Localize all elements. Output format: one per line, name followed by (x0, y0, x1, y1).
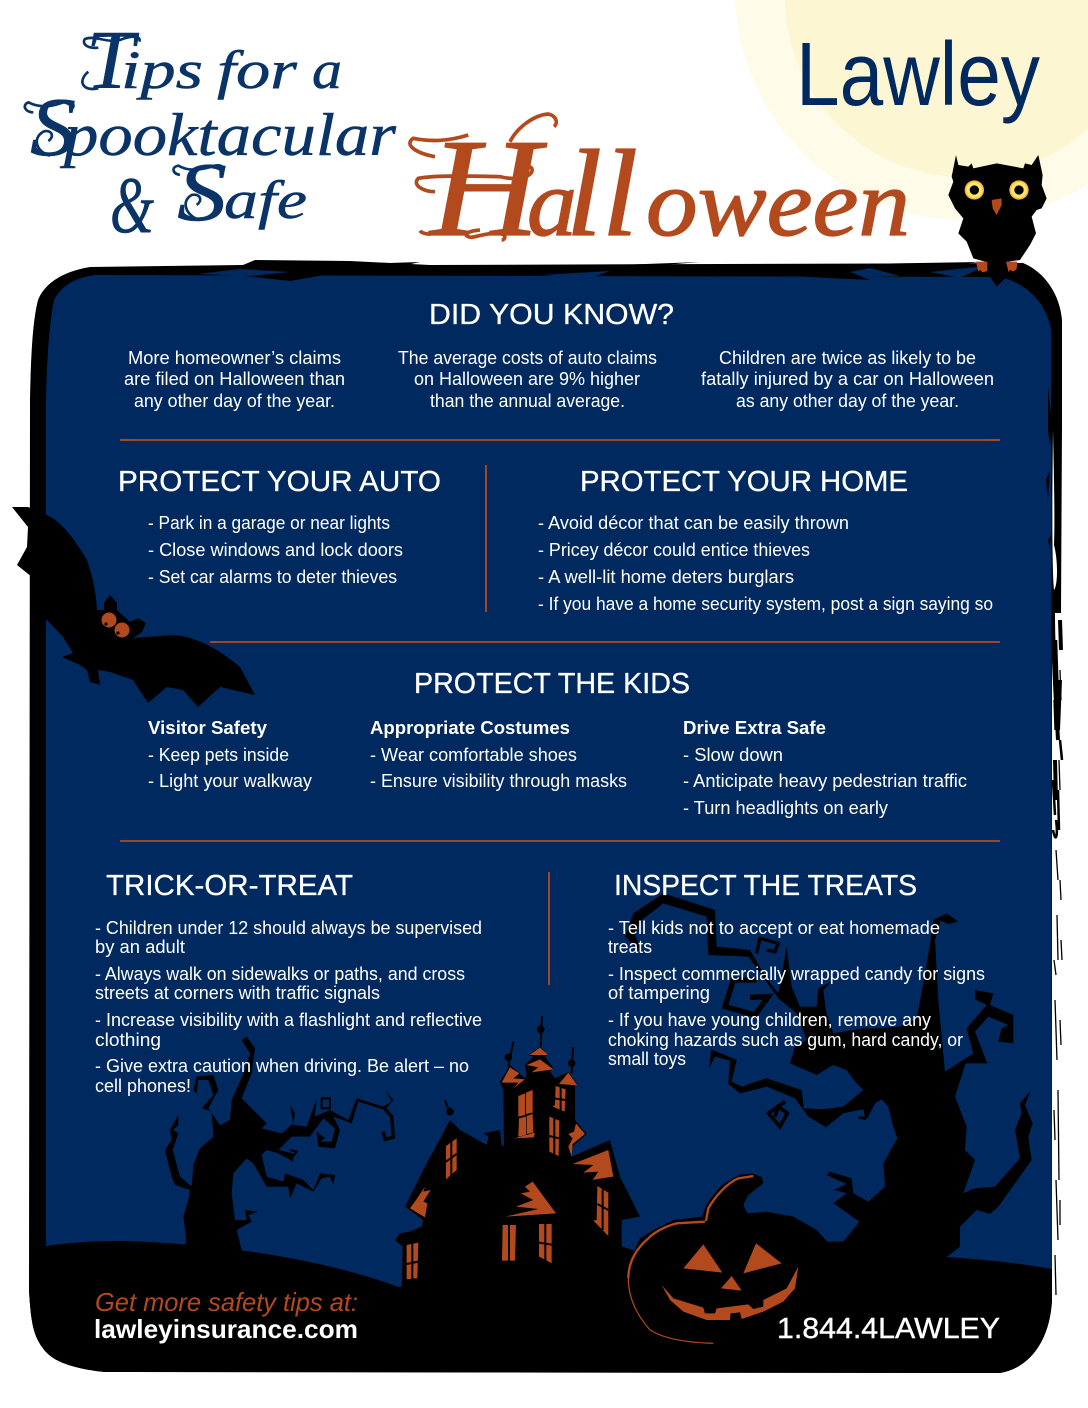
heading: trick-or-treat: TRICK-OR-TREAT (106, 870, 353, 902)
fact: homeowner claims: any other day of the year. (134, 391, 335, 411)
list: drive extra safe: Drive Extra Safe (683, 718, 826, 738)
title: Tips for a Spooktacular & Safe: for (217, 40, 298, 100)
moon (735, 0, 1088, 220)
fact: children: Children are twice as likely to be (719, 348, 976, 368)
title: Tips for a Spooktacular & Safe: pooktacular (59, 102, 397, 168)
footer: website call to action: lawleyinsurance.com (94, 1314, 358, 1344)
title: Halloween: ll (566, 125, 638, 262)
list: drive extra safe: - Turn headlights on early (683, 798, 888, 818)
list: visitor safety (148, 718, 312, 791)
title: Tips for a Spooktacular & Safe: afe (224, 170, 307, 230)
list: appropriate costumes: Appropriate Costumes (370, 718, 570, 738)
list: visitor safety: - Light your walkway (148, 771, 312, 791)
fact: homeowner claims (124, 348, 345, 411)
list: drive extra safe: - Anticipate heavy pedestrian traffic (683, 771, 967, 791)
list: inspect tips: - If you have young children, remove any (608, 1010, 931, 1030)
list: drive extra safe: - Slow down (683, 745, 783, 765)
list: visitor safety: - Keep pets inside (148, 745, 289, 765)
list: trick-or-treat tips: - Always walk on sidewalks or paths, and cross (95, 964, 465, 984)
list: inspect tips: - Tell kids not to accept or eat homemade (608, 918, 940, 938)
list: trick-or-treat tips: clothing (95, 1030, 161, 1050)
illustration: jack-o-lantern (625, 1173, 840, 1355)
illustration: right tree (625, 893, 1033, 1310)
list: appropriate costumes (370, 718, 627, 791)
fact: auto claims: than the annual average. (430, 391, 625, 411)
title: Tips for a Spooktacular & Safe (25, 14, 397, 250)
ground: hills (29, 1241, 1052, 1373)
title: Halloween: H (428, 111, 547, 266)
heading: protect your auto: PROTECT YOUR AUTO (118, 466, 441, 498)
fact: auto claims (398, 348, 657, 411)
title: Halloween: oween (646, 150, 910, 256)
footer: website call to action: Get more safety tips at: (95, 1287, 358, 1317)
list: auto tips: - Set car alarms to deter thieves (148, 567, 397, 587)
list: drive extra safe (683, 718, 967, 818)
illustration: bat (12, 507, 255, 707)
heading: did you know: DID YOU KNOW? (429, 299, 674, 331)
list: inspect tips (608, 918, 985, 1069)
list: trick-or-treat tips: - Increase visibility with a flashlight and reflective (95, 1010, 482, 1030)
footer: website call to action (94, 1287, 358, 1344)
fact: homeowner claims: More homeowner’s claims (128, 348, 341, 368)
heading: protect your home: PROTECT YOUR HOME (580, 466, 908, 498)
list: visitor safety: Visitor Safety (148, 718, 267, 738)
fact: auto claims: The average costs of auto claims (398, 348, 657, 368)
heading: inspect the treats: INSPECT THE TREATS (614, 870, 917, 902)
list: inspect tips: of tampering (608, 983, 710, 1003)
title: Tips for a Spooktacular & Safe: & (110, 162, 154, 250)
list: home tips: - Pricey décor could entice thieves (538, 540, 810, 560)
list: trick-or-treat tips (95, 918, 482, 1096)
title: Halloween (410, 111, 910, 266)
logo: Lawley: Lawley (796, 25, 1040, 125)
list: trick-or-treat tips: - Give extra caution when driving. Be alert – no (95, 1056, 469, 1076)
list: inspect tips: choking hazards such as gum, hard candy, or (608, 1030, 963, 1050)
list: auto tips: - Park in a garage or near lights (148, 513, 390, 533)
fact: auto claims: on Halloween are 9% higher (414, 369, 640, 389)
owl (948, 155, 1047, 287)
title: Tips for a Spooktacular & Safe: S (177, 146, 227, 239)
list: auto tips: - Close windows and lock doors (148, 540, 403, 560)
illustration: left tree (165, 1037, 393, 1263)
list: home tips: - Avoid décor that can be easily thrown (538, 513, 849, 533)
title: Tips for a Spooktacular & Safe: ips (121, 40, 203, 100)
title: Tips for a Spooktacular & Safe: T (86, 14, 139, 107)
list: inspect tips: - Inspect commercially wrapped candy for signs (608, 964, 985, 984)
title: Tips for a Spooktacular & Safe: S (30, 81, 76, 174)
title: Tips for a Spooktacular & Safe: a (312, 40, 342, 100)
list: trick-or-treat tips: cell phones! (95, 1076, 191, 1096)
fact: children (701, 348, 994, 411)
panel: navy board with black border (29, 260, 1088, 1378)
list: trick-or-treat tips: by an adult (95, 937, 185, 957)
fact: homeowner claims: are filed on Halloween than (124, 369, 345, 389)
footer: phone number: 1.844.4LAWLEY (777, 1313, 1000, 1345)
list: inspect tips: small toys (608, 1049, 686, 1069)
list: appropriate costumes: - Ensure visibility through masks (370, 771, 627, 791)
illustration: haunted house (390, 1016, 640, 1303)
list: home tips: - A well-lit home deters burglars (538, 567, 794, 587)
list: trick-or-treat tips: streets at corners with traffic signals (95, 983, 380, 1003)
list: auto tips (148, 513, 403, 587)
fact: children: fatally injured by a car on Halloween (701, 369, 994, 389)
heading: protect the kids: PROTECT THE KIDS (414, 668, 690, 700)
fact: children: as any other day of the year. (736, 391, 959, 411)
list: inspect tips: treats (608, 937, 652, 957)
list: appropriate costumes: - Wear comfortable shoes (370, 745, 577, 765)
list: home tips (538, 513, 993, 614)
title: Halloween: a (527, 150, 577, 256)
list: home tips: - If you have a home security system, post a sign saying so (538, 594, 993, 614)
list: trick-or-treat tips: - Children under 12 should always be supervised (95, 918, 482, 938)
